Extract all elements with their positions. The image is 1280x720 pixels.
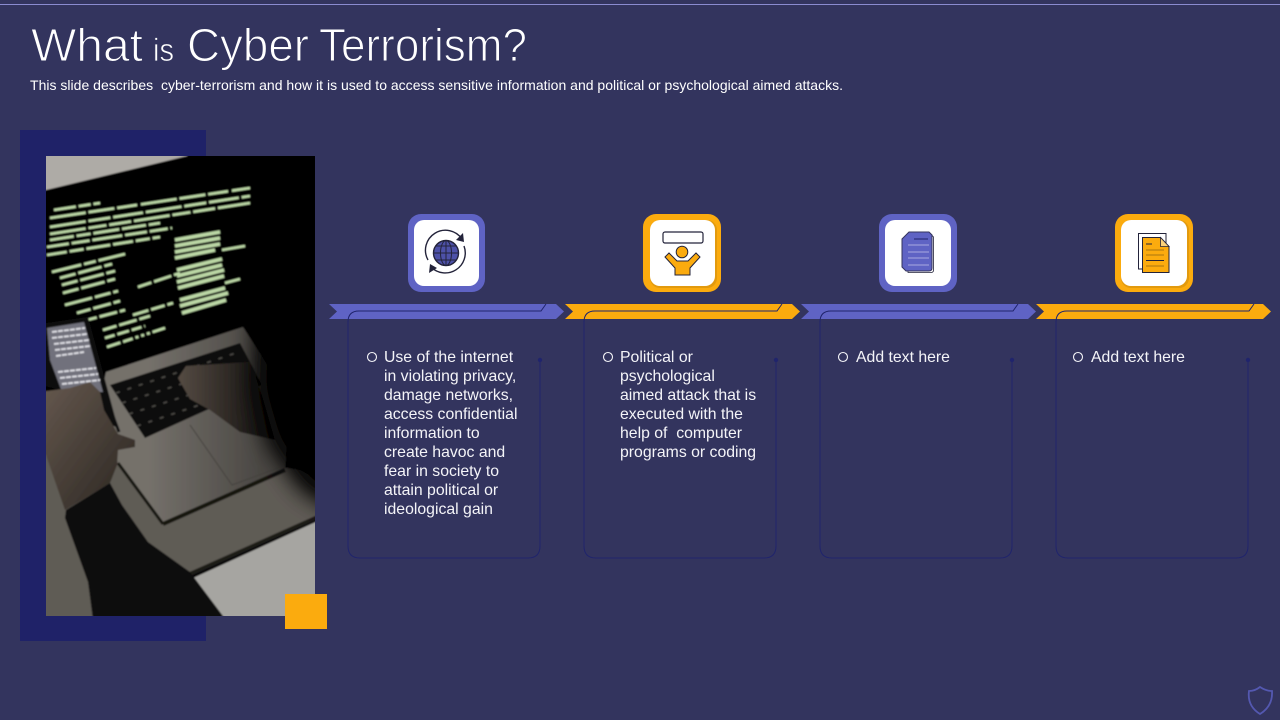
shadow on right bbox=[229, 194, 315, 522]
text 2: psychological bbox=[620, 368, 715, 385]
text 2: help of computer bbox=[620, 425, 742, 442]
icon: shield logo bbox=[1249, 687, 1272, 714]
icon tile: document bbox=[879, 214, 957, 292]
navy backing panel bbox=[20, 130, 206, 641]
chevron 3 bbox=[801, 304, 1036, 319]
bright desk corner bbox=[193, 520, 320, 620]
bullet 3 bbox=[838, 352, 848, 362]
step 3: placeholder bbox=[801, 214, 1036, 558]
text 1: access confidential bbox=[384, 406, 517, 423]
keyboard bbox=[110, 343, 262, 438]
icon tile: globe bbox=[408, 214, 485, 292]
left hand bbox=[40, 382, 135, 510]
text 1: ideological gain bbox=[384, 501, 493, 518]
photo: hands on laptop with code on screen bbox=[46, 156, 315, 616]
chevron 2 bbox=[565, 304, 800, 319]
sleeve bbox=[65, 483, 226, 620]
title: is bbox=[153, 32, 174, 68]
icon tile: stacked documents bbox=[1115, 214, 1193, 292]
icon tile: person with sign bbox=[643, 214, 721, 292]
card outline 4 bbox=[1056, 304, 1254, 558]
step 1: internet misuse bbox=[329, 214, 564, 558]
laptop base bbox=[100, 327, 290, 522]
step 4: placeholder bbox=[1036, 214, 1271, 558]
text 2: aimed attack that is bbox=[620, 387, 756, 404]
bullet 1 bbox=[368, 352, 376, 362]
card outline 2 bbox=[584, 304, 782, 558]
text 1: information to bbox=[384, 425, 480, 442]
text 1: fear in society to bbox=[384, 463, 499, 480]
yellow accent square bbox=[285, 594, 327, 629]
text 2: programs or coding bbox=[620, 444, 756, 461]
text 2: Political or bbox=[620, 349, 693, 366]
right hand bbox=[178, 362, 275, 440]
bullet 2 bbox=[604, 352, 612, 362]
text 4: Add text here bbox=[1091, 349, 1185, 366]
chevron 4 bbox=[1036, 304, 1271, 319]
bullet 4 bbox=[1074, 352, 1082, 362]
title bbox=[31, 19, 527, 71]
step 2: political attack bbox=[565, 214, 800, 558]
card outline 1 bbox=[348, 304, 546, 558]
text 1: damage networks, bbox=[384, 387, 513, 404]
card outline 3 bbox=[820, 304, 1018, 558]
text 3: Add text here bbox=[856, 349, 950, 366]
phone bbox=[40, 317, 118, 428]
chevron 1 bbox=[329, 304, 564, 319]
text 1: attain political or bbox=[384, 482, 498, 499]
table surface bbox=[46, 454, 315, 616]
trackpad outline bbox=[190, 425, 233, 485]
text 2: executed with the bbox=[620, 406, 743, 423]
title: Cyber bbox=[187, 19, 309, 71]
text 1: create havoc and bbox=[384, 444, 505, 461]
title: Terrorism? bbox=[319, 19, 527, 71]
phone lower edge bbox=[114, 419, 121, 433]
text 1: Use of the internet bbox=[384, 349, 514, 366]
subtitle: This slide describes cyber-terrorism and how it is used to access sensitive information and political or psychological aimed attacks. bbox=[30, 77, 843, 93]
title: What bbox=[31, 19, 143, 71]
screen code lines bbox=[47, 188, 250, 347]
text 1: in violating privacy, bbox=[384, 368, 516, 385]
